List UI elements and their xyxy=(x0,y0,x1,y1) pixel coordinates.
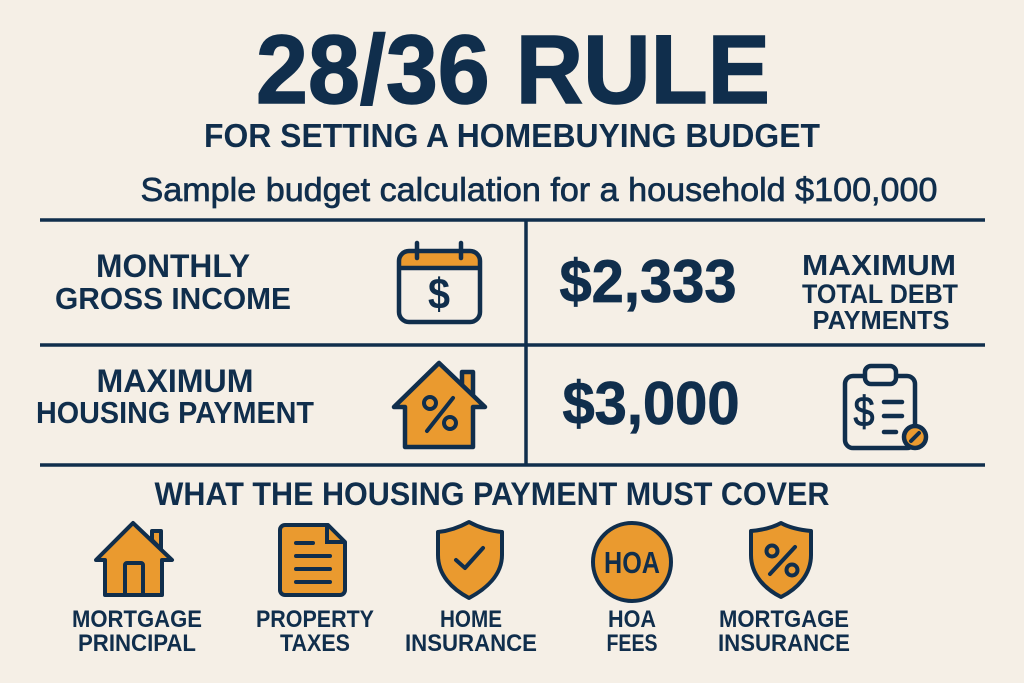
item: home insurance xyxy=(405,522,537,657)
item: property taxes xyxy=(256,525,374,657)
table grid xyxy=(40,220,985,465)
item: mortgage insurance xyxy=(718,523,850,657)
label: maximum total debt payments: PAYMENTS xyxy=(812,305,950,335)
label: maximum total debt payments: TOTAL DEBT xyxy=(802,279,958,309)
icon: shield check xyxy=(438,522,502,598)
item: home insurance: INSURANCE xyxy=(405,630,537,657)
icon: shield percent xyxy=(751,523,811,597)
section heading: WHAT THE HOUSING PAYMENT MUST COVER xyxy=(154,476,830,512)
label: maximum total debt payments: MAXIMUM xyxy=(802,250,956,282)
item: mortgage insurance: INSURANCE xyxy=(718,630,850,657)
item: hoa fees xyxy=(593,523,671,657)
item: mortgage insurance: MORTGAGE xyxy=(719,606,849,633)
item: mortgage principal xyxy=(72,523,202,657)
label: monthly gross income xyxy=(55,248,291,316)
icon: calendar with dollar xyxy=(399,243,480,322)
sample budget text: Sample budget calculation for a household $100,000 xyxy=(140,171,938,208)
icon: hoa badge: HOA xyxy=(604,545,660,580)
icon: clipboard with dollar: $ xyxy=(854,388,875,436)
label: maximum housing payment: HOUSING PAYMENT xyxy=(36,395,314,430)
item: mortgage principal: PRINCIPAL xyxy=(78,630,196,657)
value: $3,000: $3,000 xyxy=(562,370,740,437)
icon: document xyxy=(280,525,345,595)
label: monthly gross income: MONTHLY xyxy=(96,248,250,284)
label: maximum total debt payments xyxy=(802,250,958,335)
item: hoa fees: HOA xyxy=(608,606,656,633)
label: maximum housing payment xyxy=(36,363,314,430)
icon: clipboard with dollar xyxy=(845,366,926,448)
item: home insurance: HOME xyxy=(440,606,502,633)
label: maximum housing payment: MAXIMUM xyxy=(96,363,254,399)
title: 28/36 RULE xyxy=(256,15,770,124)
item: property taxes: PROPERTY xyxy=(256,606,374,633)
item: mortgage principal: MORTGAGE xyxy=(72,606,202,633)
subtitle: FOR SETTING A HOMEBUYING BUDGET xyxy=(204,117,820,154)
value: $2,333: $2,333 xyxy=(560,248,736,315)
item: property taxes: TAXES xyxy=(280,630,350,657)
icon: house with percent xyxy=(394,363,485,447)
label: monthly gross income: GROSS INCOME xyxy=(55,281,291,316)
icon: house xyxy=(96,523,172,595)
item: hoa fees: FEES xyxy=(606,630,658,657)
icon: calendar with dollar: $ xyxy=(428,270,450,319)
